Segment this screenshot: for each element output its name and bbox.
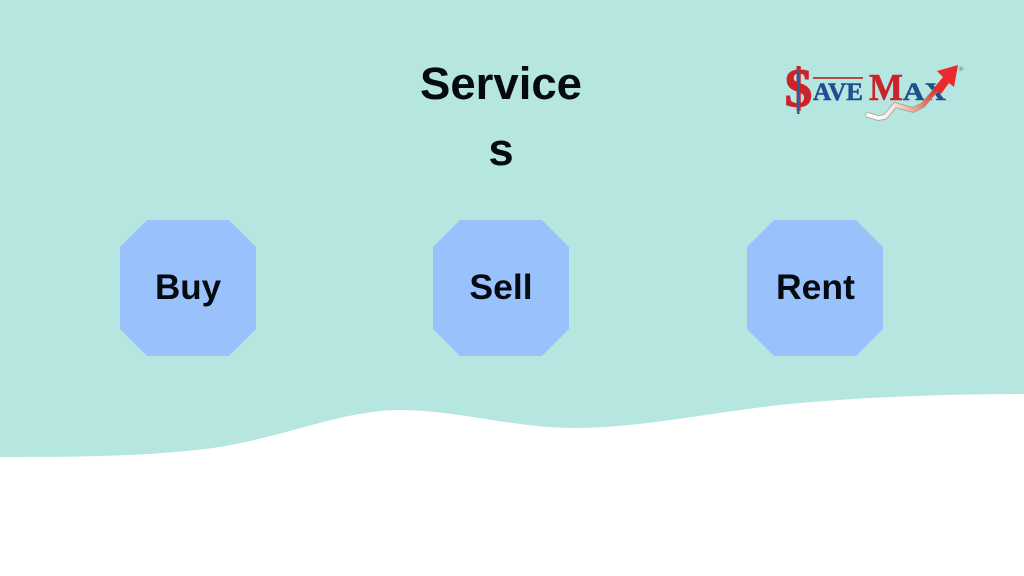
panel: sell	[433, 220, 569, 356]
icon: rising arrow	[868, 65, 958, 118]
logo wordmark	[785, 58, 964, 118]
panel: sell: Sell	[469, 267, 533, 307]
panel: buy: Buy	[155, 268, 222, 307]
title: Service	[420, 58, 582, 109]
logo wordmark: M	[869, 67, 903, 109]
panel: rent	[747, 220, 883, 356]
panel: buy	[120, 220, 256, 356]
logo wordmark: $	[785, 58, 812, 118]
logo wordmark: AX	[903, 79, 946, 106]
title: s	[488, 124, 514, 175]
title	[420, 58, 582, 175]
background wave	[0, 0, 1024, 457]
panel: rent: Rent	[776, 267, 855, 307]
logo: save max	[785, 58, 964, 118]
logo wordmark: AVE	[813, 79, 863, 106]
logo wordmark: ®	[959, 66, 964, 73]
